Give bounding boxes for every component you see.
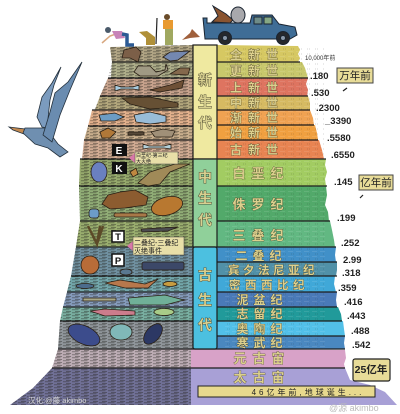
cargo: fossils in truck bed [212, 6, 245, 23]
age numbers: .199 [337, 213, 356, 224]
period labels: 志留纪 [236, 306, 288, 321]
period labels: 古新世 [230, 142, 284, 157]
age numbers: .145 [334, 177, 353, 188]
illustration: explorers and dog [102, 14, 200, 45]
badge: K: K [115, 164, 123, 175]
icon: pterosaur [9, 62, 82, 157]
figure: standing explorer [156, 14, 173, 45]
era labels: 代 [198, 115, 212, 131]
callout: earth born: 46亿年前,地球诞生... [252, 387, 364, 397]
period labels [228, 47, 318, 385]
callout: K-Pg extinction: 白垩纪-第三纪 [136, 152, 168, 159]
period labels: 宾夕法尼亚纪 [228, 263, 318, 277]
panel: era column [193, 45, 217, 349]
age numbers: .530 [311, 88, 330, 99]
period labels: 侏罗纪 [232, 197, 290, 212]
period labels: 二叠纪 [235, 248, 287, 263]
era labels: 生 [198, 292, 212, 308]
age numbers: .542 [352, 340, 370, 351]
callout: 2.5 billion years: 25亿年 [355, 363, 388, 376]
panel: geologic rows [191, 45, 397, 405]
period labels: 三叠纪 [232, 228, 290, 243]
figure: crawling explorer [102, 27, 134, 45]
period labels: 寒武纪 [236, 335, 288, 350]
period labels: 太古宙 [233, 370, 291, 385]
period labels: 始新世 [230, 125, 284, 140]
period labels: 渐新世 [230, 110, 284, 125]
arrow: ten thousand years [343, 88, 347, 91]
icon: dog [139, 31, 155, 45]
illustration: truck [203, 6, 297, 44]
badge: T [112, 231, 124, 243]
period labels: 密西西比纪 [229, 278, 309, 292]
age numbers: .443 [347, 311, 366, 322]
badge: P [112, 254, 124, 267]
panel: fossils [65, 47, 190, 350]
callout: P-T extinction: 二叠纪-三叠纪 [134, 238, 178, 247]
era labels: 中 [198, 169, 212, 185]
era labels: 代 [198, 212, 212, 228]
callout: 2.5 billion years [353, 359, 390, 381]
era labels [198, 72, 212, 333]
badge: E: E [116, 146, 123, 157]
period labels: 上新世 [230, 80, 284, 95]
age numbers: .359 [338, 283, 356, 294]
callout: P-T extinction: 灭绝事件 [134, 246, 162, 255]
era labels: 古 [198, 267, 212, 283]
age numbers: .252 [341, 238, 360, 249]
badge: T: T [115, 232, 121, 243]
age numbers: _3390 [324, 116, 351, 127]
era labels: 代 [198, 317, 212, 333]
period labels: 全新世 [230, 47, 284, 62]
period labels: 白垩纪 [232, 166, 290, 181]
era labels: 新 [198, 72, 212, 88]
period labels: 元古宙 [233, 351, 291, 366]
callout: P-T extinction [127, 237, 184, 255]
watermark: left: 汉化:@藤 akimbo [28, 395, 86, 405]
watermark: right: @源 akimbo [329, 403, 379, 413]
callout: earth born [198, 386, 375, 397]
age numbers: 2.99 [343, 255, 362, 266]
callout: K-Pg extinction: 大灭绝 [136, 158, 151, 165]
era labels: 生 [198, 94, 212, 110]
arrow: hundred million years [360, 195, 363, 198]
age numbers: .180 [310, 71, 328, 82]
callout: ten thousand years: 万年前 [339, 69, 371, 82]
age numbers: .416 [344, 297, 362, 308]
era labels: 生 [198, 190, 212, 206]
period labels: 更新世 [230, 63, 284, 78]
age numbers [305, 54, 370, 351]
badge: K [112, 162, 127, 175]
period labels: 泥盆纪 [236, 292, 288, 307]
badge: E [112, 144, 127, 157]
age numbers: .318 [342, 268, 360, 279]
badge: P: P [115, 256, 122, 267]
age numbers: .5580 [327, 133, 351, 144]
period labels: 中新世 [230, 95, 284, 110]
age numbers: .6550 [331, 150, 355, 161]
age numbers: .2300 [316, 103, 340, 114]
age numbers: .488 [351, 326, 370, 337]
age numbers: 10,000年前 [305, 54, 335, 62]
callout: hundred million years: 亿年前 [360, 176, 392, 189]
callout: K-Pg extinction [129, 152, 178, 165]
period labels: 奥陶纪 [236, 321, 288, 336]
panel: left strata cliff [10, 45, 193, 405]
icon: rabbit [182, 29, 200, 40]
